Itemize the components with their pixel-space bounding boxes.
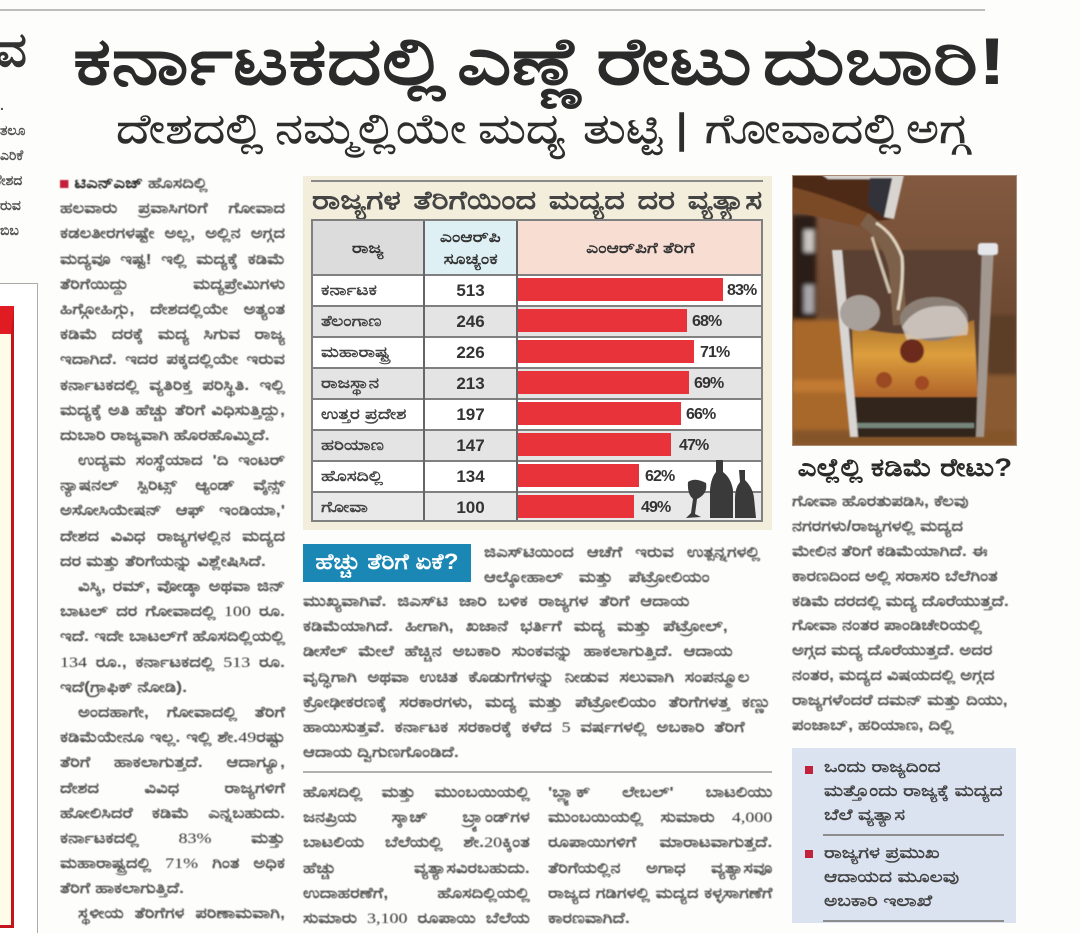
row: Goa xyxy=(312,491,763,522)
left article column: ಕರ್ನಾಟಕದಲ್ಲಿ ವ್ಯತಿರಿಕ್ತ ಪರಿಸ್ಥಿತಿ. ಇಲ್ಲಿ xyxy=(60,376,285,394)
row: Telangana: ತೆಲಂಗಾಣ xyxy=(321,313,382,330)
row: Maharashtra: 226 xyxy=(456,343,485,362)
side article text: ಅಗ್ಗದ ಮದ್ಯ ದೊರೆಯುತ್ತದೆ. ಅದರ xyxy=(792,642,992,659)
table header row xyxy=(312,220,763,275)
side article text: ಗೋವಾ ನಂತರ ಪಾಂಡಿಚೇರಿಯಲ್ಲಿ xyxy=(792,617,982,634)
header: state: ರಾಜ್ಯ xyxy=(352,240,384,257)
lower article column 1: ಹೆಚ್ಚು ವ್ಯತ್ಯಾಸವಿರಬಹುದು. xyxy=(303,860,530,877)
neighbouring article fragment: ಬಿಬ xyxy=(0,222,19,238)
why high tax: intro lines beside heading: ಜಿಎಸ್‌ಟಿಯಿಂದ ಆಚೆಗೆ ಇರುವ ಉತ್ಪನ್ನಗಳಲ್ಲಿ xyxy=(484,544,760,561)
left article column: ಹಲವಾರು ಪ್ರವಾಸಿಗರಿಗೆ ಗೋವಾದ xyxy=(60,200,285,217)
left article column: ತೆರಿಗೆಯಿದ್ದು ಮದ್ಯಪ್ರೇಮಿಗಳು xyxy=(60,276,285,293)
left article column: 134 ರೂ., ಕರ್ನಾಟಕದಲ್ಲಿ 513 ರೂ. xyxy=(60,654,285,671)
row: Telangana: 68% xyxy=(692,313,721,330)
row: New Delhi: 62% xyxy=(645,468,674,485)
left article column: ಟಿಎನ್‌ಎಜ್ ಹೊಸದಿಲ್ಲಿ xyxy=(74,175,208,192)
bullet: revenue source: ಆದಾಯದ ಮೂಲವು xyxy=(824,869,959,886)
left article column: ತೆರಿಗೆ ಹಾಕಲಾಗುತ್ತಿದೆ. xyxy=(60,880,184,897)
row: Maharashtra: 71% xyxy=(700,344,729,361)
bullet: price difference: ಒಂದು ರಾಜ್ಯದಿಂದ xyxy=(824,759,941,776)
left article column: ದೇಶದ ವಿವಿಧ ರಾಜ್ಯಗಳಿಗೆ xyxy=(60,780,285,796)
left article column: ನ್ಯಾಷನಲ್ ಸ್ಪಿರಿಟ್ಸ್ ಆ್ಯಂಡ್ ವೈನ್ಸ್ xyxy=(60,477,285,494)
side article text: ಕಡಿಮೆ ದರದಲ್ಲಿ ಮದ್ಯ ದೊರೆಯುತ್ತದೆ. xyxy=(792,593,1009,610)
left article column: ದರ ಮತ್ತು ತೆರಿಗೆಯನ್ನು ವಿಶ್ಲೇಷಿಸಿದೆ. xyxy=(60,553,266,570)
row: Goa: ಗೋವಾ xyxy=(321,499,368,516)
left article column: ಕಡಲತೀರಗಳಷ್ಟೇ ಅಲ್ಲ, ಅಲ್ಲಿನ ಅಗ್ಗದ xyxy=(60,225,285,242)
row: Uttar Pradesh: ಉತ್ತರ ಪ್ರದೇಶ xyxy=(321,406,406,423)
row: Karnataka xyxy=(312,274,763,305)
left article column: ಅಸೋಸಿಯೇಷನ್ ಆಫ್ ಇಂಡಿಯಾ,' xyxy=(60,502,285,519)
left article column: ಮದ್ಯವೂ ಇಷ್ಟ! ಇಲ್ಲಿ ಮದ್ಯಕ್ಕೆ ಕಡಿಮೆ xyxy=(60,251,285,268)
lower article column 1: ಹೊಸದಿಲ್ಲಿ ಮತ್ತು ಮುಂಬಯಿಯಲ್ಲಿ xyxy=(303,784,530,801)
lower article column 2: ರಾಜ್ಯದ ಗಡಿಗಳಲ್ಲಿ ಮದ್ಯದ ಕಳ್ಳಸಾಗಣೆಗೆ xyxy=(548,885,772,902)
bullet: revenue source: ಅಬಕಾರಿ ಇಲಾಖೆ xyxy=(824,893,932,910)
side article text xyxy=(792,493,1009,735)
side article text: ನಂತರ, ಮದ್ಯದ ವಿಷಯದಲ್ಲಿ ಅಗ್ಗದ xyxy=(792,667,995,684)
row: Karnataka: ಕರ್ನಾಟಕ xyxy=(321,282,377,299)
left article column: ಅಂದಹಾಗೇ, ಗೋವಾದಲ್ಲಿ ತೆರಿಗೆ xyxy=(78,704,285,721)
why high tax: body text: ಕಡಿಮೆಯಾಗಿದೆ. ಹೀಗಾಗಿ, ಖಜಾನೆ ಭರ್ತಿಗೆ ಮದ್ಯ ಮತ್ತು ಪೆಟ್ರೋಲ್, xyxy=(303,618,728,635)
side article text: ಕಾರಣದಿಂದ ಅಲ್ಲಿ ಸರಾಸರಿ ಬೆಲೆಗಿಂತ xyxy=(792,568,998,585)
lower article column 1: ಸುಮಾರು 3,100 ರೂಪಾಯಿ ಬೆಲೆಯ xyxy=(303,910,530,927)
why high tax: body text: ಹಾಯಿಸುತ್ತವೆ. ಕರ್ನಾಟಕ ಸರಕಾರಕ್ಕೆ ಕಳೆದ 5 ವರ್ಷಗಳಲ್ಲಿ ಅಬಕಾರಿ ತೆರಿಗೆ xyxy=(303,719,745,736)
lower article column 2: ಕಾರಣವಾಗಿದೆ. xyxy=(548,910,630,927)
row: Haryana xyxy=(312,429,763,460)
row: Haryana: ಹರಿಯಾಣ xyxy=(321,437,384,454)
why high tax: intro lines beside heading xyxy=(484,544,761,588)
lower article column 2: ತೆರಿಗೆಯಲ್ಲಿನ ಅಗಾಧ ವ್ಯತ್ಯಾಸವೂ xyxy=(548,860,772,877)
left article column: ಕಡಿಮೆ ದರಕ್ಕೆ ಮದ್ಯ ಸಿಗುವ ರಾಜ್ಯ xyxy=(60,326,285,343)
side heading: where is it cheap: ಎಲ್ಲೆಲ್ಲಿ ಕಡಿಮೆ ರೇಟು? xyxy=(797,454,1012,482)
row: Maharashtra xyxy=(312,336,763,367)
bullet: price difference xyxy=(805,759,1003,827)
chart title: ರಾಜ್ಯಗಳ ತೆರಿಗೆಯಿಂದ ಮದ್ಯದ ದರ ವ್ಯತ್ಯಾಸ xyxy=(312,185,762,215)
left article column: ಉದ್ಯಮ ಸಂಸ್ಥೆಯಾದ 'ದಿ ಇಂಟರ್ xyxy=(78,452,285,469)
header: MRP index: ಸೂಚ್ಯಂಕ xyxy=(443,251,498,268)
bullet: revenue source xyxy=(805,845,959,910)
icon: wine glass and bottles xyxy=(686,460,756,518)
header: MRP index: ಎಂಆರ್‌ಪಿ xyxy=(440,229,501,246)
table grid lines xyxy=(311,219,763,522)
row: New Delhi: 134 xyxy=(456,467,485,486)
side article text: ಪಂಜಾಬ್, ಹರಿಯಾಣ, ದಿಲ್ಲಿ xyxy=(792,717,954,734)
left article column: ಬಾಟಲ್ ದರ ಗೋವಾದಲ್ಲಿ 100 ರೂ. xyxy=(60,603,285,620)
neighbouring article fragment: ತಲೂ xyxy=(0,122,25,138)
why high tax: body text: ಡೀಸೆಲ್ ಮೇಲೆ ಹೆಚ್ಚಿನ ಅಬಕಾರಿ ಸುಂಕವನ್ನು ಹಾಕಲಾಗುತ್ತಿದೆ. ಆದಾಯ xyxy=(303,643,733,660)
header: tax on MRP xyxy=(517,220,763,275)
callout heading: why high tax: ಹೆಚ್ಚು ತೆರಿಗೆ ಏಕೆ? xyxy=(315,549,459,574)
panel: key points box xyxy=(792,748,1016,923)
why high tax: body text: ಆದಾಯ ದ್ವಿಗುಣಗೊಂಡಿದೆ. xyxy=(303,744,459,761)
left article column: ಇದಾಗಿದೆ. ಇದರ ಪಕ್ಕದಲ್ಲಿಯೇ ಇರುವ xyxy=(60,351,285,368)
left article column xyxy=(59,175,286,926)
neighbouring panel: red framed box xyxy=(0,283,38,933)
row: Uttar Pradesh xyxy=(312,398,763,429)
row: Karnataka: 83% xyxy=(727,282,756,299)
header: tax on MRP: ಎಂಆರ್‌ಪಿಗೆ ತೆರಿಗೆ xyxy=(586,240,694,257)
left article column: ವಿಸ್ಕಿ, ರಮ್, ವೋಡ್ಕಾ ಅಥವಾ ಜಿನ್ xyxy=(78,578,285,595)
row: Goa: 100 xyxy=(456,498,485,517)
subtitle: ದೇಶದಲ್ಲಿ ನಮ್ಮಲ್ಲಿಯೇ ಮದ್ಯ ತುಟ್ಟಿ | ಗೋವಾದಲ್ಲಿ ಅಗ್ಗ xyxy=(116,105,969,152)
neighbouring article fragment: . xyxy=(0,97,4,113)
row: Rajasthan xyxy=(312,367,763,398)
why high tax: body text: ಕ್ರೋಢೀಕರಣಕ್ಕೆ ಸರಕಾರಗಳು, ಮದ್ಯ ಮತ್ತು ಪೆಟ್ರೋಲಿಯಂ ತೆರಿಗೆಗಳತ್ತ ಕಣ್ಣು xyxy=(303,694,771,711)
left article column: ದೇಶದ ವಿವಿಧ ರಾಜ್ಯಗಳಲ್ಲಿನ ಮದ್ಯದ xyxy=(60,528,285,545)
lower article column 1: ಬಾಟಲಿಯ ಬೆಲೆಯಲ್ಲಿ ಶೇ.20ಕ್ಕಿಂತ xyxy=(303,834,530,851)
row: Karnataka: 513 xyxy=(456,281,485,300)
lower article column 2: ರೂಪಾಯಿಗಳಿಗೆ ಮಾರಾಟವಾಗುತ್ತದೆ. xyxy=(548,834,772,851)
why high tax: body text: ವೃದ್ಧಿಗಾಗಿ ಅಥವಾ ಉಚಿತ ಕೊಡುಗೆಗಳನ್ನು ನೀಡುವ ಸಲುವಾಗಿ ಸಂಪನ್ಮೂಲ xyxy=(303,669,749,686)
left article column: ಮದ್ಯಕ್ಕೆ ಅತಿ ಹೆಚ್ಚು ತೆರಿಗೆ ವಿಧಿಸುತ್ತಿದ್ದು, xyxy=(60,402,285,419)
neighbouring article fragment: ಎರಿಕೆ xyxy=(0,147,23,163)
row: Maharashtra: ಮಹಾರಾಷ್ಟ್ರ xyxy=(321,344,390,361)
lower article column 2: 'ಬ್ಲ್ಯಾಕ್ ಲೇಬಲ್' ಬಾಟಲಿಯು xyxy=(548,784,772,801)
row: Rajasthan: 213 xyxy=(456,374,485,393)
left article column: ದುಬಾರಿ ರಾಜ್ಯವಾಗಿ ಹೊರಹೊಮ್ಮಿದೆ. xyxy=(60,427,270,444)
row: New Delhi xyxy=(312,460,763,491)
lower article column 1: ಉದಾಹರಣೆಗೆ, ಹೊಸದಿಲ್ಲಿಯಲ್ಲಿ xyxy=(303,885,530,902)
left article column: ಕಡಿಮೆಯೇನೂ ಇಲ್ಲ. ಇಲ್ಲಿ ಶೇ.49ರಷ್ಟು xyxy=(60,729,285,746)
left article column: ಮಹಾರಾಷ್ಟ್ರದಲ್ಲಿ 71% ಗಿಂತ ಅಧಿಕ xyxy=(60,855,285,872)
neighbouring article fragment: ರುವ xyxy=(0,197,21,213)
bullet: price difference: ಮತ್ತೊಂದು ರಾಜ್ಯಕ್ಕೆ ಮದ್ಯದ xyxy=(824,783,1003,800)
left article column: ಇದೆ. ಇದೇ ಬಾಟಲ್‌ಗೆ ಹೊಸದಿಲ್ಲಿಯಲ್ಲಿ xyxy=(60,628,285,645)
neighbouring article fragment xyxy=(0,24,27,238)
panel: state liquor price table xyxy=(303,176,772,530)
header: MRP index xyxy=(424,220,517,275)
row: Uttar Pradesh: 66% xyxy=(686,406,715,423)
side article text: ನಗರಗಳು/ರಾಜ್ಯಗಳಲ್ಲಿ ಮದ್ಯದ xyxy=(792,518,963,535)
row: Uttar Pradesh: 197 xyxy=(456,405,485,424)
left article column: ತೆರಿಗೆ ಹಾಕಲಾಗುತ್ತದೆ. ಆದಾಗ್ಯೂ, xyxy=(60,754,285,771)
row: Telangana xyxy=(312,305,763,336)
side article text: ಗೋವಾ ಹೊರತುಪಡಿಸಿ, ಕೆಲವು xyxy=(792,493,969,510)
row: Telangana: 246 xyxy=(456,312,485,331)
header: state xyxy=(312,220,424,275)
photo: whisky poured into glass xyxy=(792,175,1017,446)
side article text: ಮೇಲಿನ ತೆರಿಗೆ ಕಡಿಮೆಯಾಗಿದೆ. ಈ xyxy=(792,543,987,560)
row: Haryana: 47% xyxy=(679,437,708,454)
left article column: ಕರ್ನಾಟಕದಲ್ಲಿ 83% ಮತ್ತು xyxy=(60,830,285,847)
row: New Delhi: ಹೊಸದಿಲ್ಲಿ xyxy=(321,468,383,485)
row: Haryana: 147 xyxy=(456,436,485,455)
lower article column 1: ಜನಪ್ರಿಯ ಸ್ಕಾಚ್ ಬ್ರ್ಯಾಂಡ್‌ಗಳ xyxy=(303,809,530,826)
title: ಕರ್ನಾಟಕದಲ್ಲಿ ಎಣ್ಣೆ ರೇಟು ದುಬಾರಿ! xyxy=(73,24,1006,98)
row: Rajasthan: ರಾಜಸ್ಥಾನ xyxy=(321,375,379,392)
callout heading: why high tax xyxy=(303,544,471,582)
side article text: ರಾಜ್ಯಗಳೆಂದರೆ ದಮನ್ ಮತ್ತು ದಿಯು, xyxy=(792,692,1008,709)
left article column: ಸ್ಥಳೀಯ ತೆರಿಗೆಗಳ ಪರಿಣಾಮವಾಗಿ, xyxy=(78,905,285,922)
row: Rajasthan: 69% xyxy=(694,375,723,392)
why high tax: body text: ಮುಖ್ಯವಾಗಿವೆ. ಜಿಎಸ್‌ಟಿ ಜಾರಿ ಬಳಿಕ ರಾಜ್ಯಗಳ ತೆರಿಗೆ ಆದಾಯ xyxy=(303,593,689,610)
left article column: ಇದೆ(ಗ್ರಾಫಿಕ್ ನೋಡಿ). xyxy=(60,679,187,696)
why high tax: intro lines beside heading: ಆಲ್ಕೋಹಾಲ್ ಮತ್ತು ಪೆಟ್ರೋಲಿಯಂ xyxy=(484,569,710,586)
page top rule xyxy=(0,9,985,11)
row: Goa: 49% xyxy=(641,499,670,516)
lower article column 2 xyxy=(548,784,774,927)
lower article column 2: ಮುಂಬಯಿಯಲ್ಲಿ ಸುಮಾರು 4,000 xyxy=(548,809,772,826)
left article column: ಹಿಗ್ಗೋಹಿಗ್ಗು, ದೇಶದಲ್ಲಿಯೇ ಅತ್ಯಂತ xyxy=(60,301,285,318)
lower article column 1 xyxy=(302,784,530,927)
why high tax: body text xyxy=(302,593,771,763)
bullet: price difference: ಬೆಲೆ ವ್ಯತ್ಯಾಸ xyxy=(824,807,905,824)
bullet: revenue source: ರಾಜ್ಯಗಳ ಪ್ರಮುಖ xyxy=(824,845,940,862)
left article column: ಹೋಲಿಸಿದರೆ ಕಡಿಮೆ ಎನ್ನಬಹುದು. xyxy=(60,805,285,822)
